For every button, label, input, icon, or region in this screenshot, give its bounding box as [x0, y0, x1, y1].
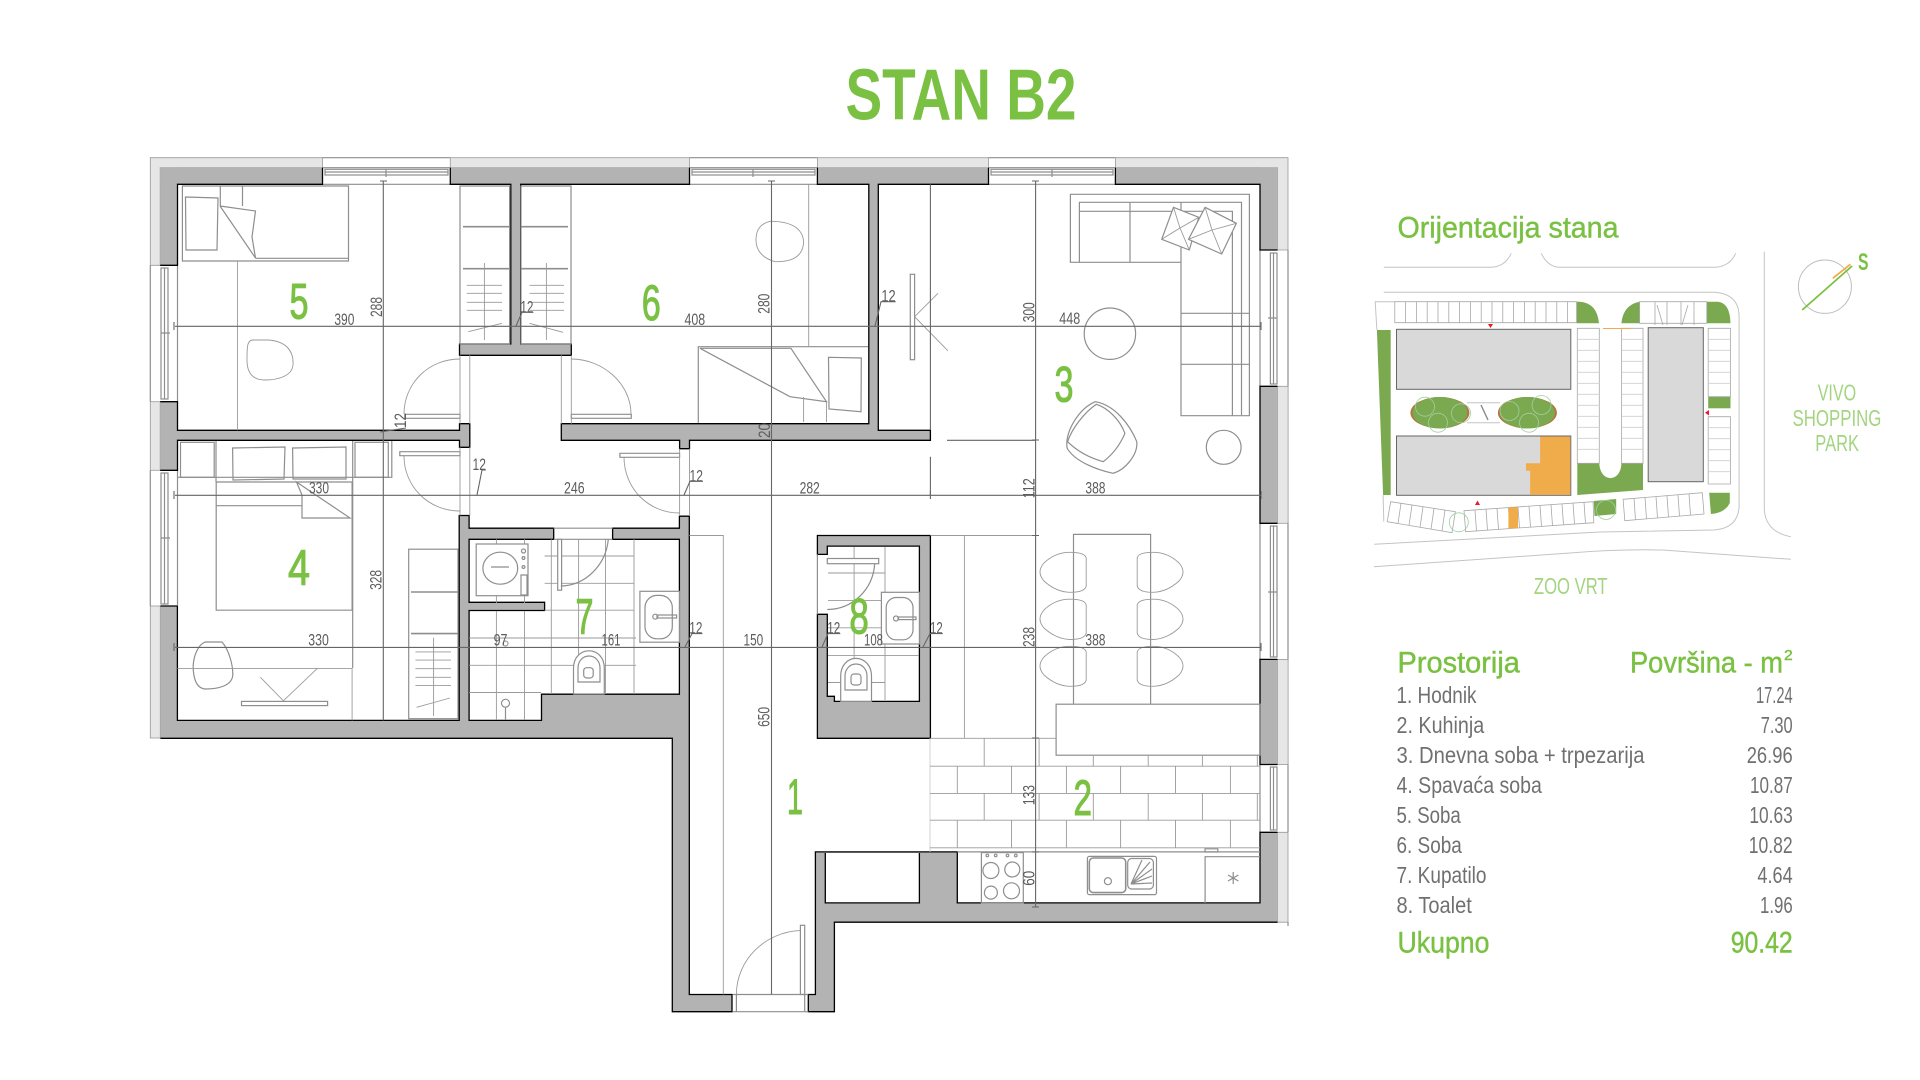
room 4 bed [178, 441, 392, 668]
dimension labels: 448 [1059, 310, 1080, 328]
armchair [1067, 402, 1137, 473]
dimension labels: 12 [392, 413, 410, 428]
room names: 2. Kuhinja [1396, 712, 1485, 738]
room numbers: 2 [1074, 770, 1092, 826]
sofa [1070, 194, 1249, 416]
shower drain [502, 699, 510, 720]
room numbers [288, 273, 1092, 826]
dimension labels: 282 [800, 479, 820, 497]
dimension labels: 60 [1020, 871, 1038, 886]
dimension labels: 12 [881, 288, 896, 306]
kitchen floor tiles [930, 738, 1260, 852]
dimension labels: 112 [1020, 478, 1038, 498]
room 6 wardrobe [521, 186, 571, 344]
room numbers: 1 [787, 769, 803, 825]
room names: 5. Soba [1396, 802, 1462, 828]
toilet room sink [881, 592, 919, 644]
table header: Površina - m [1630, 647, 1783, 680]
entrance markers [1475, 324, 1709, 505]
label: Vivo Shopping Park [1792, 380, 1881, 456]
room areas: 10.82 [1749, 832, 1793, 858]
site plan [1374, 249, 1881, 599]
dimension labels: 280 [756, 294, 774, 314]
room 6 bed [698, 184, 868, 423]
parking stalls [1387, 302, 1730, 533]
doors: rooms and corridor [400, 355, 690, 516]
dimension labels: 12 [690, 467, 703, 485]
room numbers: 4 [288, 540, 310, 596]
floor plan [150, 158, 1288, 1012]
dimension labels: 388 [1085, 632, 1106, 650]
dimension labels: 20 [756, 423, 774, 438]
dimension labels: 288 [368, 297, 386, 317]
dimension labels: 300 [1020, 302, 1038, 322]
toilet room toilet [841, 658, 872, 701]
room 4 wardrobe [409, 549, 458, 719]
room numbers: 7 [576, 589, 594, 645]
room areas: 26.96 [1747, 742, 1793, 768]
room names: 8. Toalet [1396, 892, 1472, 918]
corridor guide line [689, 536, 723, 994]
room numbers: 8 [849, 588, 869, 644]
washing machine [476, 544, 528, 596]
room 4 chair and tv [177, 642, 352, 720]
room areas: 17.24 [1756, 682, 1793, 708]
fridge [1205, 849, 1260, 903]
room names [1396, 682, 1645, 918]
room names: 6. Soba [1396, 832, 1463, 858]
dimension labels: 390 [334, 311, 354, 329]
dimension labels: 161 [602, 632, 620, 650]
bathroom sink [640, 591, 679, 642]
dimension labels [308, 288, 1106, 886]
label: Vivo Shopping Park: PARK [1815, 430, 1859, 456]
walls [160, 168, 1278, 1012]
title: STAN B2 [846, 56, 1076, 136]
stove [981, 853, 1023, 903]
courtyard ovals [1410, 396, 1616, 532]
room names: 3. Dnevna soba + trpezarija [1396, 742, 1645, 768]
dimension labels: 133 [1020, 785, 1038, 805]
dimension labels: 238 [1020, 627, 1038, 647]
room areas [1747, 682, 1793, 918]
green areas [1377, 302, 1730, 516]
dimension labels: 108 [864, 632, 883, 650]
round tables [1084, 308, 1241, 464]
kitchen sink [1087, 856, 1156, 895]
apartment highlight [1508, 328, 1631, 528]
toilet room door [817, 554, 879, 614]
room names: 7. Kupatilo [1396, 862, 1486, 888]
label: Zoo Vrt: ZOO VRT [1534, 573, 1608, 599]
dining chairs [1040, 552, 1183, 686]
room numbers: 5 [290, 273, 308, 329]
dimension labels: 408 [684, 311, 705, 329]
exterior insulation [150, 158, 1288, 922]
compass: S [1858, 249, 1868, 276]
small floor drain symbol [503, 641, 508, 646]
dining table and counter [930, 534, 1260, 755]
dimension labels: 12 [930, 620, 943, 638]
room names: 1. Hodnik [1396, 682, 1477, 708]
heading: orientation: Orijentacija stana [1398, 211, 1619, 244]
dimension labels: 328 [367, 570, 385, 590]
dimension labels: 150 [744, 632, 763, 650]
entry door [732, 925, 808, 1012]
compass [1798, 249, 1868, 313]
dimension labels: 330 [308, 632, 329, 650]
total: Ukupno [1398, 927, 1490, 960]
room areas: 1.96 [1760, 892, 1793, 918]
furniture: room 5 bed [182, 186, 348, 261]
room numbers: 6 [642, 275, 661, 331]
table header: 2 [1784, 647, 1793, 664]
room 5 guide line and chair [238, 261, 293, 430]
dimension labels: 97 [494, 632, 508, 650]
kitchen counter line [957, 851, 1260, 853]
table header: Prostorija [1398, 647, 1520, 680]
dimension labels: 12 [472, 456, 486, 474]
buildings [1396, 328, 1703, 495]
label: Vivo Shopping Park: VIVO [1818, 380, 1856, 406]
room areas: 10.87 [1750, 772, 1793, 798]
wall outlines [160, 168, 1278, 1012]
total [1398, 927, 1793, 960]
bathroom tiles [469, 539, 636, 720]
dimension labels: 246 [564, 479, 585, 497]
table header [1398, 647, 1793, 680]
dimension lines [174, 181, 1261, 994]
closet niche [825, 853, 919, 903]
room areas: 4.64 [1757, 862, 1793, 888]
total: 90.42 [1731, 927, 1793, 960]
room areas: 7.30 [1761, 712, 1793, 738]
roads [1374, 252, 1791, 567]
room 5 wardrobe [460, 186, 510, 344]
toilet room tiles [828, 547, 919, 700]
dimension labels: 650 [756, 707, 774, 727]
room 3 tv unit [910, 184, 1036, 495]
dimension labels: 388 [1085, 479, 1106, 497]
dimension labels: 12 [520, 298, 533, 316]
room areas: 10.63 [1749, 802, 1793, 828]
bathroom toilet [574, 651, 604, 694]
dimension labels: 330 [309, 479, 329, 497]
bathroom door [554, 528, 613, 590]
room names: 4. Spavaća soba [1396, 772, 1543, 798]
label: Vivo Shopping Park: SHOPPING [1792, 405, 1881, 431]
dimension labels: 12 [827, 620, 840, 638]
dimension labels: 12 [689, 620, 702, 638]
windows [150, 158, 1288, 926]
room area table [1396, 647, 1793, 960]
room numbers: 3 [1054, 356, 1074, 412]
